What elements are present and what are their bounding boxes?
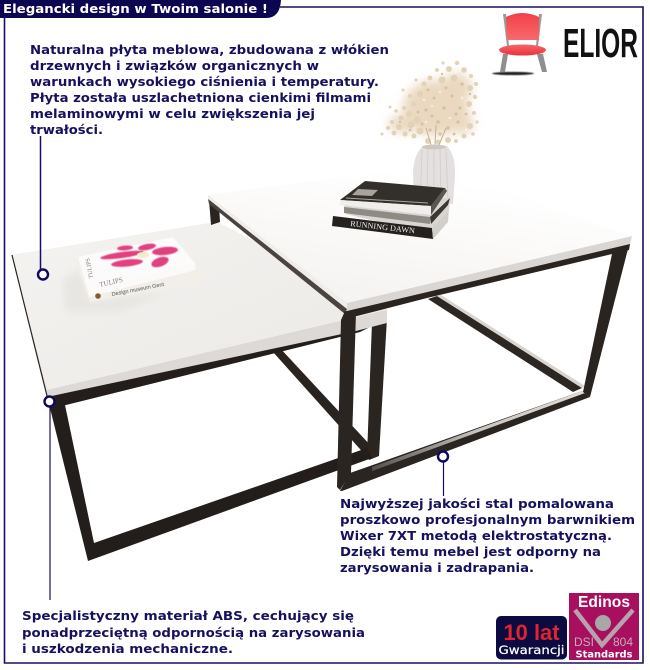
connector: edge banding marker	[44, 396, 54, 600]
header tab: Elegancki design w Twoim salonie !	[3, 1, 268, 16]
connector: steel frame marker	[438, 452, 448, 496]
decor: dried flowers	[380, 61, 479, 145]
badge: 10 year warranty: Gwarancji	[498, 643, 564, 657]
small table: back right leg	[367, 318, 387, 460]
text block: ABS material: i uszkodzenia mechaniczne.	[22, 641, 233, 656]
connector: board marker	[38, 136, 48, 280]
badge: Edinos standards: 804	[613, 635, 633, 649]
text block: steel frame	[340, 496, 635, 575]
text block: steel frame: Najwyższej jakości stal pomalowana	[340, 496, 614, 511]
text block: board description: melaminowymi w celu zwiększenia jej	[30, 106, 315, 121]
large table: white top	[208, 170, 632, 314]
text block: steel frame: Wixer 7XT metodą elektrostatyczną.	[340, 528, 612, 543]
large table: front leg	[337, 311, 356, 490]
back rail of large table	[428, 295, 585, 392]
book: Tulips	[76, 237, 202, 302]
book: Tulips: TULIPS	[86, 258, 95, 279]
book: Tulips: Design museum Gent	[111, 282, 165, 298]
small table: inner side rail	[273, 347, 372, 458]
text block: steel frame: Dzięki temu mebel jest odporny na	[340, 544, 601, 559]
book: Tulips: TULIPS	[99, 276, 124, 289]
small table: white top	[12, 222, 387, 397]
large table: top rail	[347, 244, 630, 318]
small table: top rail	[47, 322, 372, 406]
text block: board description: warunkach wysokiego ciśnienia i temperatury.	[30, 74, 379, 89]
text block: board description: Naturalna płyta meblowa, zbudowana z włókien	[30, 42, 389, 57]
small table: base frame	[47, 398, 372, 561]
text block: ABS material: ponadprzeciętną odpornością na zarysowania	[22, 625, 365, 640]
large table: bottom front rail	[340, 391, 590, 491]
text block: board description: trwałości.	[30, 122, 103, 137]
text block: steel frame: proszkowo profesjonalnym barwnikiem	[340, 512, 635, 527]
large table: right leg	[583, 245, 629, 397]
decor: ribbed vase	[413, 144, 455, 204]
badge: 10 year warranty: 10 lat	[504, 620, 560, 645]
badge: Edinos standards: Standards	[576, 650, 633, 660]
text block: board description: drzewnych i związków organicznych w	[30, 58, 319, 73]
badge: Edinos standards	[569, 593, 639, 660]
text block: ABS material	[22, 608, 365, 656]
text block: board description	[30, 42, 389, 137]
books stack	[332, 181, 450, 239]
badge: Edinos standards: DSI	[574, 635, 594, 649]
badge: Edinos standards: Edinos	[578, 594, 630, 611]
text block: board description: Płyta została uszlachetniona cienkimi filmami	[30, 90, 371, 105]
text block: ABS material: Specjalistyczny materiał ABS, cechujący się	[22, 608, 354, 623]
large table: back left leg	[209, 200, 220, 225]
text block: steel frame: zarysowania i zadrapania.	[340, 560, 534, 575]
books stack: RUNNING DAWN	[350, 219, 416, 235]
badge: 10 year warranty	[496, 616, 567, 660]
logo: chair icon	[492, 13, 547, 75]
